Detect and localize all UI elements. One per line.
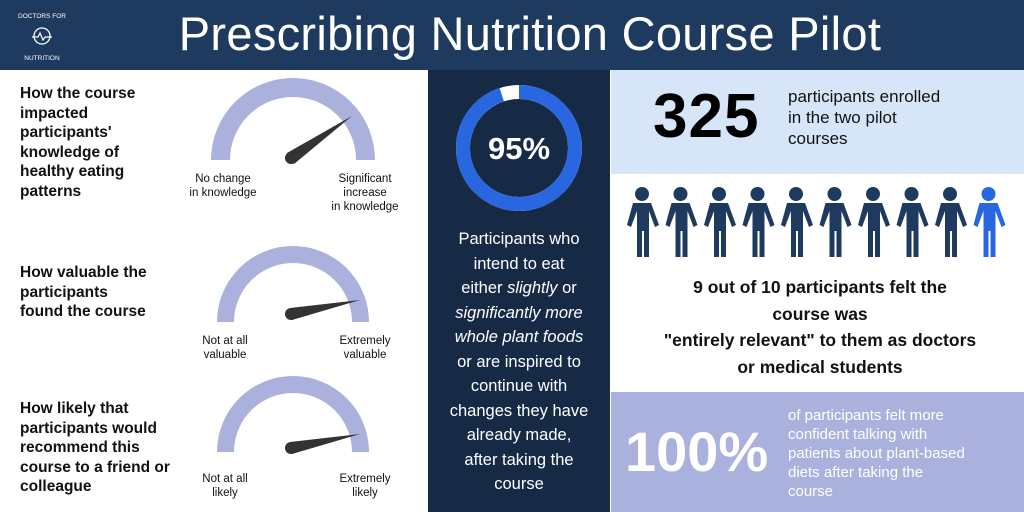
panel: gauges: likely [352,487,378,499]
95% description: continue with [471,377,567,395]
gauge 3 [217,376,369,454]
question 3: recommend this [20,439,140,456]
gauge 2 labels [202,335,248,361]
question 2: participants [20,284,108,300]
icon row: people [627,187,1006,257]
header bar [0,0,1024,70]
big number 100%: 100% [625,420,768,483]
question 1: patterns [20,182,81,200]
confident text: patients about plant-based [788,445,965,462]
enrolled text: courses [788,129,848,148]
gauge 3 labels: likely [212,487,238,499]
95% description: course [494,475,544,493]
confident text: diets after taking the [788,464,923,481]
big number 325: 325 [653,82,759,151]
gauge 1 [211,78,375,164]
confident text: confident talking with [788,426,927,443]
relevance text: or medical students [737,356,903,376]
95% description: or are inspired to [457,352,581,370]
relevance text: 9 out of 10 participants felt the [693,277,947,297]
question 2: found the course [20,303,146,320]
question 1: impacted [20,104,88,122]
95% description: already made, [467,426,571,444]
question 1 [20,85,135,200]
relevance text [664,277,976,376]
panel: gauges: Extremely [339,473,391,485]
logo: DOCTORS FOR [18,13,66,20]
panel: gauges [20,78,399,499]
95% description: whole plant foods [455,328,583,346]
panel: gauges: in knowledge [331,201,399,213]
gauge 1 labels: in knowledge [189,187,257,199]
95% description: changes they have [450,402,588,420]
donut chart: 95% [488,131,550,166]
panel: 325 enrolled [611,70,1024,174]
enrolled text [788,87,940,148]
question 3: course to a friend or [20,458,170,476]
question 2 [20,264,147,320]
panel: gauges: Significant [338,173,392,185]
panel: 100% confident [611,392,1024,512]
logo [18,13,66,62]
gauge 2 [217,246,369,322]
95% description [450,230,588,493]
panel: 95% column [428,70,610,512]
gauge 2 labels: Not at all [202,335,248,347]
logo: NUTRITION [24,55,60,62]
question 1: How the course [20,85,135,102]
donut chart [456,85,582,211]
panel: gauges: Extremely [339,335,391,347]
95% description: after taking the [464,450,574,468]
question 1: participants' [20,124,112,141]
panel: gauges: valuable [344,349,386,361]
95% description: intend to eat [474,254,564,272]
question 2: How valuable the [20,264,147,281]
confident text: course [788,483,833,500]
95% description: significantly more [455,304,583,322]
question 1: knowledge of [20,144,119,160]
gauge 2 labels: valuable [204,349,246,361]
question 1: healthy eating [20,163,124,180]
95% description: either slightly or [461,279,577,297]
question 3: How likely that [20,400,129,417]
relevance text: course was [772,304,868,324]
enrolled text: participants enrolled [788,87,940,106]
gauge 1 labels: No change [195,173,251,185]
gauge 3 labels [202,473,248,499]
gauge 1 labels [189,173,257,199]
95% description: Participants who [458,230,580,248]
confident text: of participants felt more [788,407,944,424]
question 3: colleague [20,478,92,495]
question 3: participants would [20,420,157,436]
gauge 3 labels: Not at all [202,473,248,485]
enrolled text: in the two pilot [788,108,897,127]
relevance text: "entirely relevant" to them as doctors [664,330,976,350]
confident text [788,407,965,500]
title: Prescribing Nutrition Course Pilot [179,7,881,60]
panel: gauges: increase [343,187,387,199]
question 3 [20,400,170,495]
